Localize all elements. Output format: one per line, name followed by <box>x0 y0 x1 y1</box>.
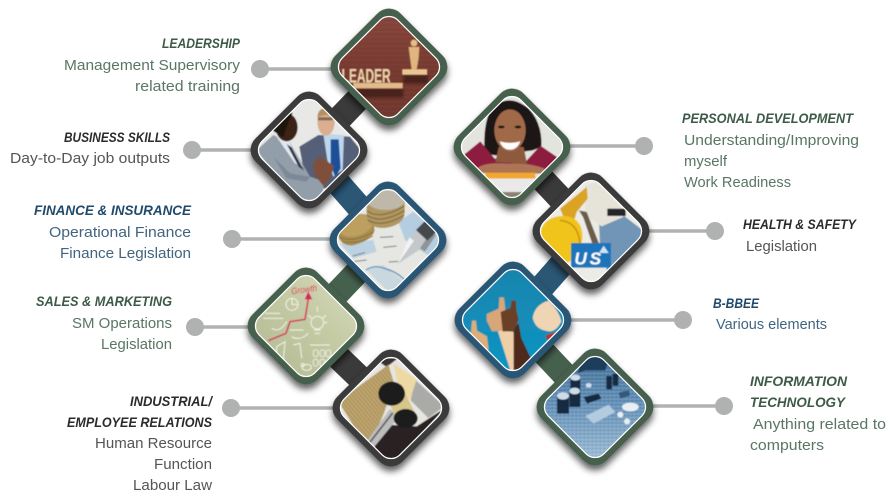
business skills text: Day-to-Day job outputs <box>10 151 170 167</box>
connector bar: personal development to health <box>512 147 591 231</box>
icon: growth chalk drawing diamond: Growth <box>291 283 318 296</box>
sales text: SALES & MARKETING <box>36 294 172 309</box>
information technology pointer <box>645 397 733 415</box>
leadership text: LEADERSHIP <box>162 36 241 51</box>
information technology text: Anything related to <box>753 417 886 433</box>
icon: leader photo diamond: LEADER <box>342 67 391 88</box>
health and safety text <box>743 217 858 255</box>
finance text <box>34 203 192 262</box>
B-BBEE text: Various elements <box>716 317 827 333</box>
leadership text: Management Supervisory <box>64 58 241 74</box>
business skills text <box>10 130 170 167</box>
information technology text <box>750 374 886 454</box>
personal development text: Work Readiness <box>684 175 791 191</box>
finance text: FINANCE & INSURANCE <box>34 203 192 218</box>
icon: safety helmet photo diamond <box>526 166 656 296</box>
B-BBEE text: B-BBEE <box>713 296 760 311</box>
business skills pointer <box>183 141 262 159</box>
icon: gavel photo diamond <box>326 343 456 473</box>
connector bar: leadership to business skills <box>309 67 389 150</box>
icon: business people photo diamond <box>244 85 374 215</box>
sales text <box>36 294 172 353</box>
B-BBEE text <box>713 296 827 333</box>
icon: safety helmet photo diamond: US <box>574 249 602 269</box>
industrial relations text: INDUSTRIAL/ <box>130 394 213 409</box>
B-BBEE pointer <box>558 311 692 329</box>
connector bar: finance to sales <box>306 240 388 326</box>
industrial relations text: Function <box>154 457 212 473</box>
connector bar: sales to industrial relations <box>306 326 391 408</box>
industrial relations text <box>67 394 213 494</box>
information technology text: INFORMATION <box>750 374 848 389</box>
industrial relations text: EMPLOYEE RELATIONS <box>67 415 212 430</box>
icon: thumbs up photo diamond <box>448 255 578 385</box>
icon: growth chalk drawing diamond <box>241 261 371 391</box>
panel: business skills <box>10 85 374 215</box>
business skills text: BUSINESS SKILLS <box>64 130 170 145</box>
icon: circuit board photo diamond <box>530 342 660 472</box>
personal development text <box>682 111 859 191</box>
health and safety text: HEALTH & SAFETY <box>743 217 858 232</box>
industrial relations text: Labour Law <box>133 478 213 494</box>
panel: leadership <box>64 0 457 134</box>
panel: sales and marketing <box>36 261 371 391</box>
industrial relations text: Human Resource <box>95 436 212 452</box>
panel: personal development <box>447 82 859 212</box>
personal development pointer <box>555 137 653 155</box>
leadership text: related training <box>135 79 240 95</box>
leadership pointer <box>251 60 340 78</box>
finance text: Operational Finance <box>49 225 191 241</box>
icon: coins and pen photo diamond <box>323 175 453 305</box>
personal development text: myself <box>684 154 728 170</box>
industrial relations pointer <box>222 399 340 417</box>
personal development text: PERSONAL DEVELOPMENT <box>682 111 855 126</box>
icon: smiling woman photo diamond <box>447 82 577 212</box>
personal development text: Understanding/Improving <box>684 133 859 149</box>
connector bar: health to B-BBEE <box>513 231 591 320</box>
sales pointer <box>186 318 260 336</box>
panel: finance and insurance <box>34 175 453 305</box>
leadership text <box>64 36 241 95</box>
panel: information technology <box>530 342 886 472</box>
information technology text: TECHNOLOGY <box>750 395 847 410</box>
panel: health and safety <box>526 166 858 296</box>
sales text: Legislation <box>101 337 172 353</box>
panel: industrial and employee relations <box>67 343 456 494</box>
panel: B-BBEE <box>448 255 827 385</box>
sales text: SM Operations <box>72 316 172 332</box>
finance text: Finance Legislation <box>60 246 191 262</box>
icon: leader photo diamond <box>323 0 457 134</box>
connector bar: B-BBEE to IT <box>513 320 595 407</box>
finance pointer <box>223 230 340 248</box>
health and safety pointer <box>640 222 724 240</box>
connector bar: business skills to finance <box>309 150 388 240</box>
health and safety text: Legislation <box>746 239 817 255</box>
information technology text: computers <box>750 438 824 454</box>
